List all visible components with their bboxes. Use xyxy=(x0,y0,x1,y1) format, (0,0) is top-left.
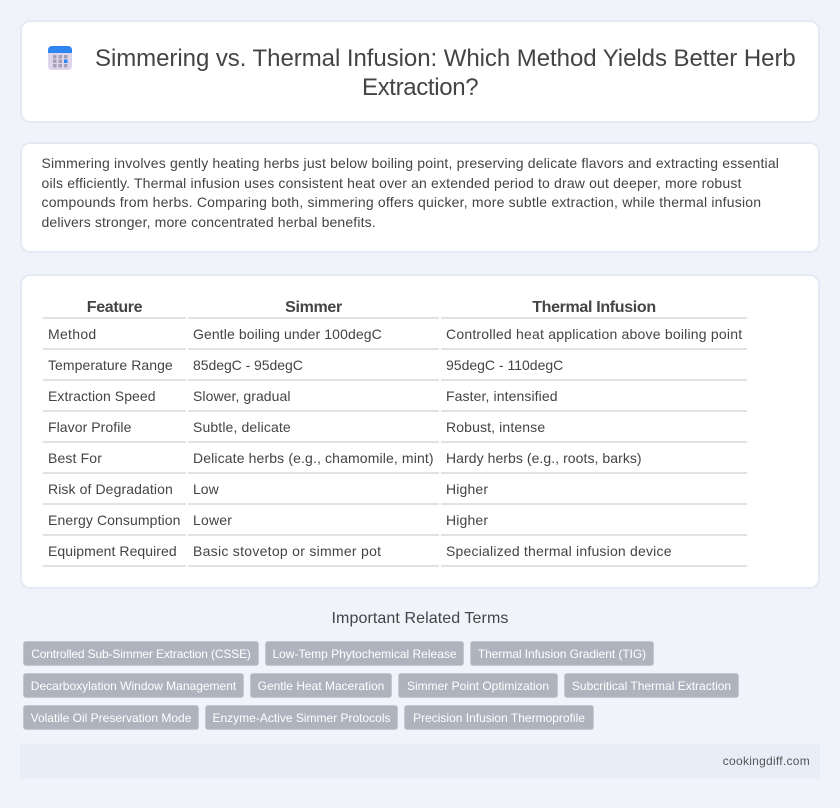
row: equipment required xyxy=(48,543,672,559)
row: best for: Delicate herbs (e.g., chamomile, mint) xyxy=(193,450,434,466)
tag: Simmer Point Optimization xyxy=(407,679,549,693)
intro paragraph: oils efficiently. Thermal infusion uses consistent heat over an extended period to draw out deeper, more robust xyxy=(42,174,742,190)
tag: Gentle Heat Maceration xyxy=(258,679,384,693)
comparison table panel xyxy=(20,274,820,589)
table header: Thermal Infusion xyxy=(532,299,656,316)
row: risk of degradation: Higher xyxy=(446,481,488,497)
tag xyxy=(398,673,558,698)
related terms heading: Important Related Terms xyxy=(332,610,508,627)
intro paragraph: delivers stronger, more concentrated herbal benefits. xyxy=(42,214,376,230)
tag xyxy=(265,641,464,666)
tag: Volatile Oil Preservation Mode xyxy=(31,711,191,725)
tag xyxy=(205,705,398,730)
row: best for: Hardy herbs (e.g., roots, barks) xyxy=(446,450,642,466)
tag xyxy=(404,705,594,730)
comparison table xyxy=(43,299,747,567)
intro paragraph: Simmering involves gently heating herbs just below boiling point, preserving delicate flavors and extracting essential xyxy=(42,155,779,171)
row: method: Method xyxy=(48,326,96,342)
icon: calendar xyxy=(48,46,72,70)
row: temperature range: 85degC - 95degC xyxy=(193,357,303,373)
intro text panel xyxy=(20,142,820,253)
tag: Low-Temp Phytochemical Release xyxy=(272,647,457,661)
row: risk of degradation xyxy=(48,481,488,497)
table header xyxy=(87,299,656,316)
row: risk of degradation: Low xyxy=(193,481,219,497)
footer source: cookingdiff.com xyxy=(723,754,810,768)
tag xyxy=(250,673,392,698)
row: energy consumption: Energy Consumption xyxy=(48,512,181,528)
intro paragraph xyxy=(42,155,779,230)
tag xyxy=(470,641,654,666)
row: energy consumption: Higher xyxy=(446,512,488,528)
tag: Decarboxylation Window Management xyxy=(31,679,236,693)
table header: Feature xyxy=(87,299,142,316)
title xyxy=(95,45,796,101)
table header: Simmer xyxy=(285,299,342,316)
row: extraction speed: Slower, gradual xyxy=(193,388,291,404)
tag: Controlled Sub-Simmer Extraction (CSSE) xyxy=(31,647,251,661)
row: flavor profile: Robust, intense xyxy=(446,419,545,435)
row: method: Controlled heat application above boiling point xyxy=(446,326,742,342)
row: equipment required: Specialized thermal infusion device xyxy=(446,543,672,559)
row: best for: Best For xyxy=(48,450,102,466)
row: method: Gentle boiling under 100degC xyxy=(193,326,382,342)
row: equipment required: Equipment Required xyxy=(48,543,177,559)
title card xyxy=(20,20,820,123)
tag xyxy=(23,705,199,730)
intro paragraph: compounds from herbs. Comparing both, simmering offers quicker, more subtle extraction, while thermal infusion xyxy=(42,194,761,210)
row: risk of degradation: Risk of Degradation xyxy=(48,481,173,497)
tag: Subcritical Thermal Extraction xyxy=(572,679,731,693)
footer bar xyxy=(20,744,820,778)
tag xyxy=(564,673,739,698)
tag: Enzyme-Active Simmer Protocols xyxy=(212,711,391,725)
tag xyxy=(23,641,259,666)
row: temperature range xyxy=(48,357,563,373)
title: Extraction? xyxy=(362,74,478,101)
row: extraction speed: Faster, intensified xyxy=(446,388,558,404)
row: flavor profile xyxy=(48,419,545,435)
row: temperature range: 95degC - 110degC xyxy=(446,357,563,373)
row: extraction speed: Extraction Speed xyxy=(48,388,156,404)
row: energy consumption xyxy=(48,512,488,528)
row: flavor profile: Flavor Profile xyxy=(48,419,131,435)
row: flavor profile: Subtle, delicate xyxy=(193,419,291,435)
title: Simmering vs. Thermal Infusion: Which Method Yields Better Herb xyxy=(95,45,796,72)
row: energy consumption: Lower xyxy=(193,512,232,528)
related terms tags xyxy=(23,641,739,730)
tag: Thermal Infusion Gradient (TIG) xyxy=(478,647,646,661)
row: equipment required: Basic stovetop or simmer pot xyxy=(193,543,381,559)
tag: Precision Infusion Thermoprofile xyxy=(413,711,585,725)
tag xyxy=(23,673,244,698)
row: extraction speed xyxy=(48,388,558,404)
row: temperature range: Temperature Range xyxy=(48,357,173,373)
row: best for xyxy=(48,450,642,466)
row: method xyxy=(48,326,742,342)
